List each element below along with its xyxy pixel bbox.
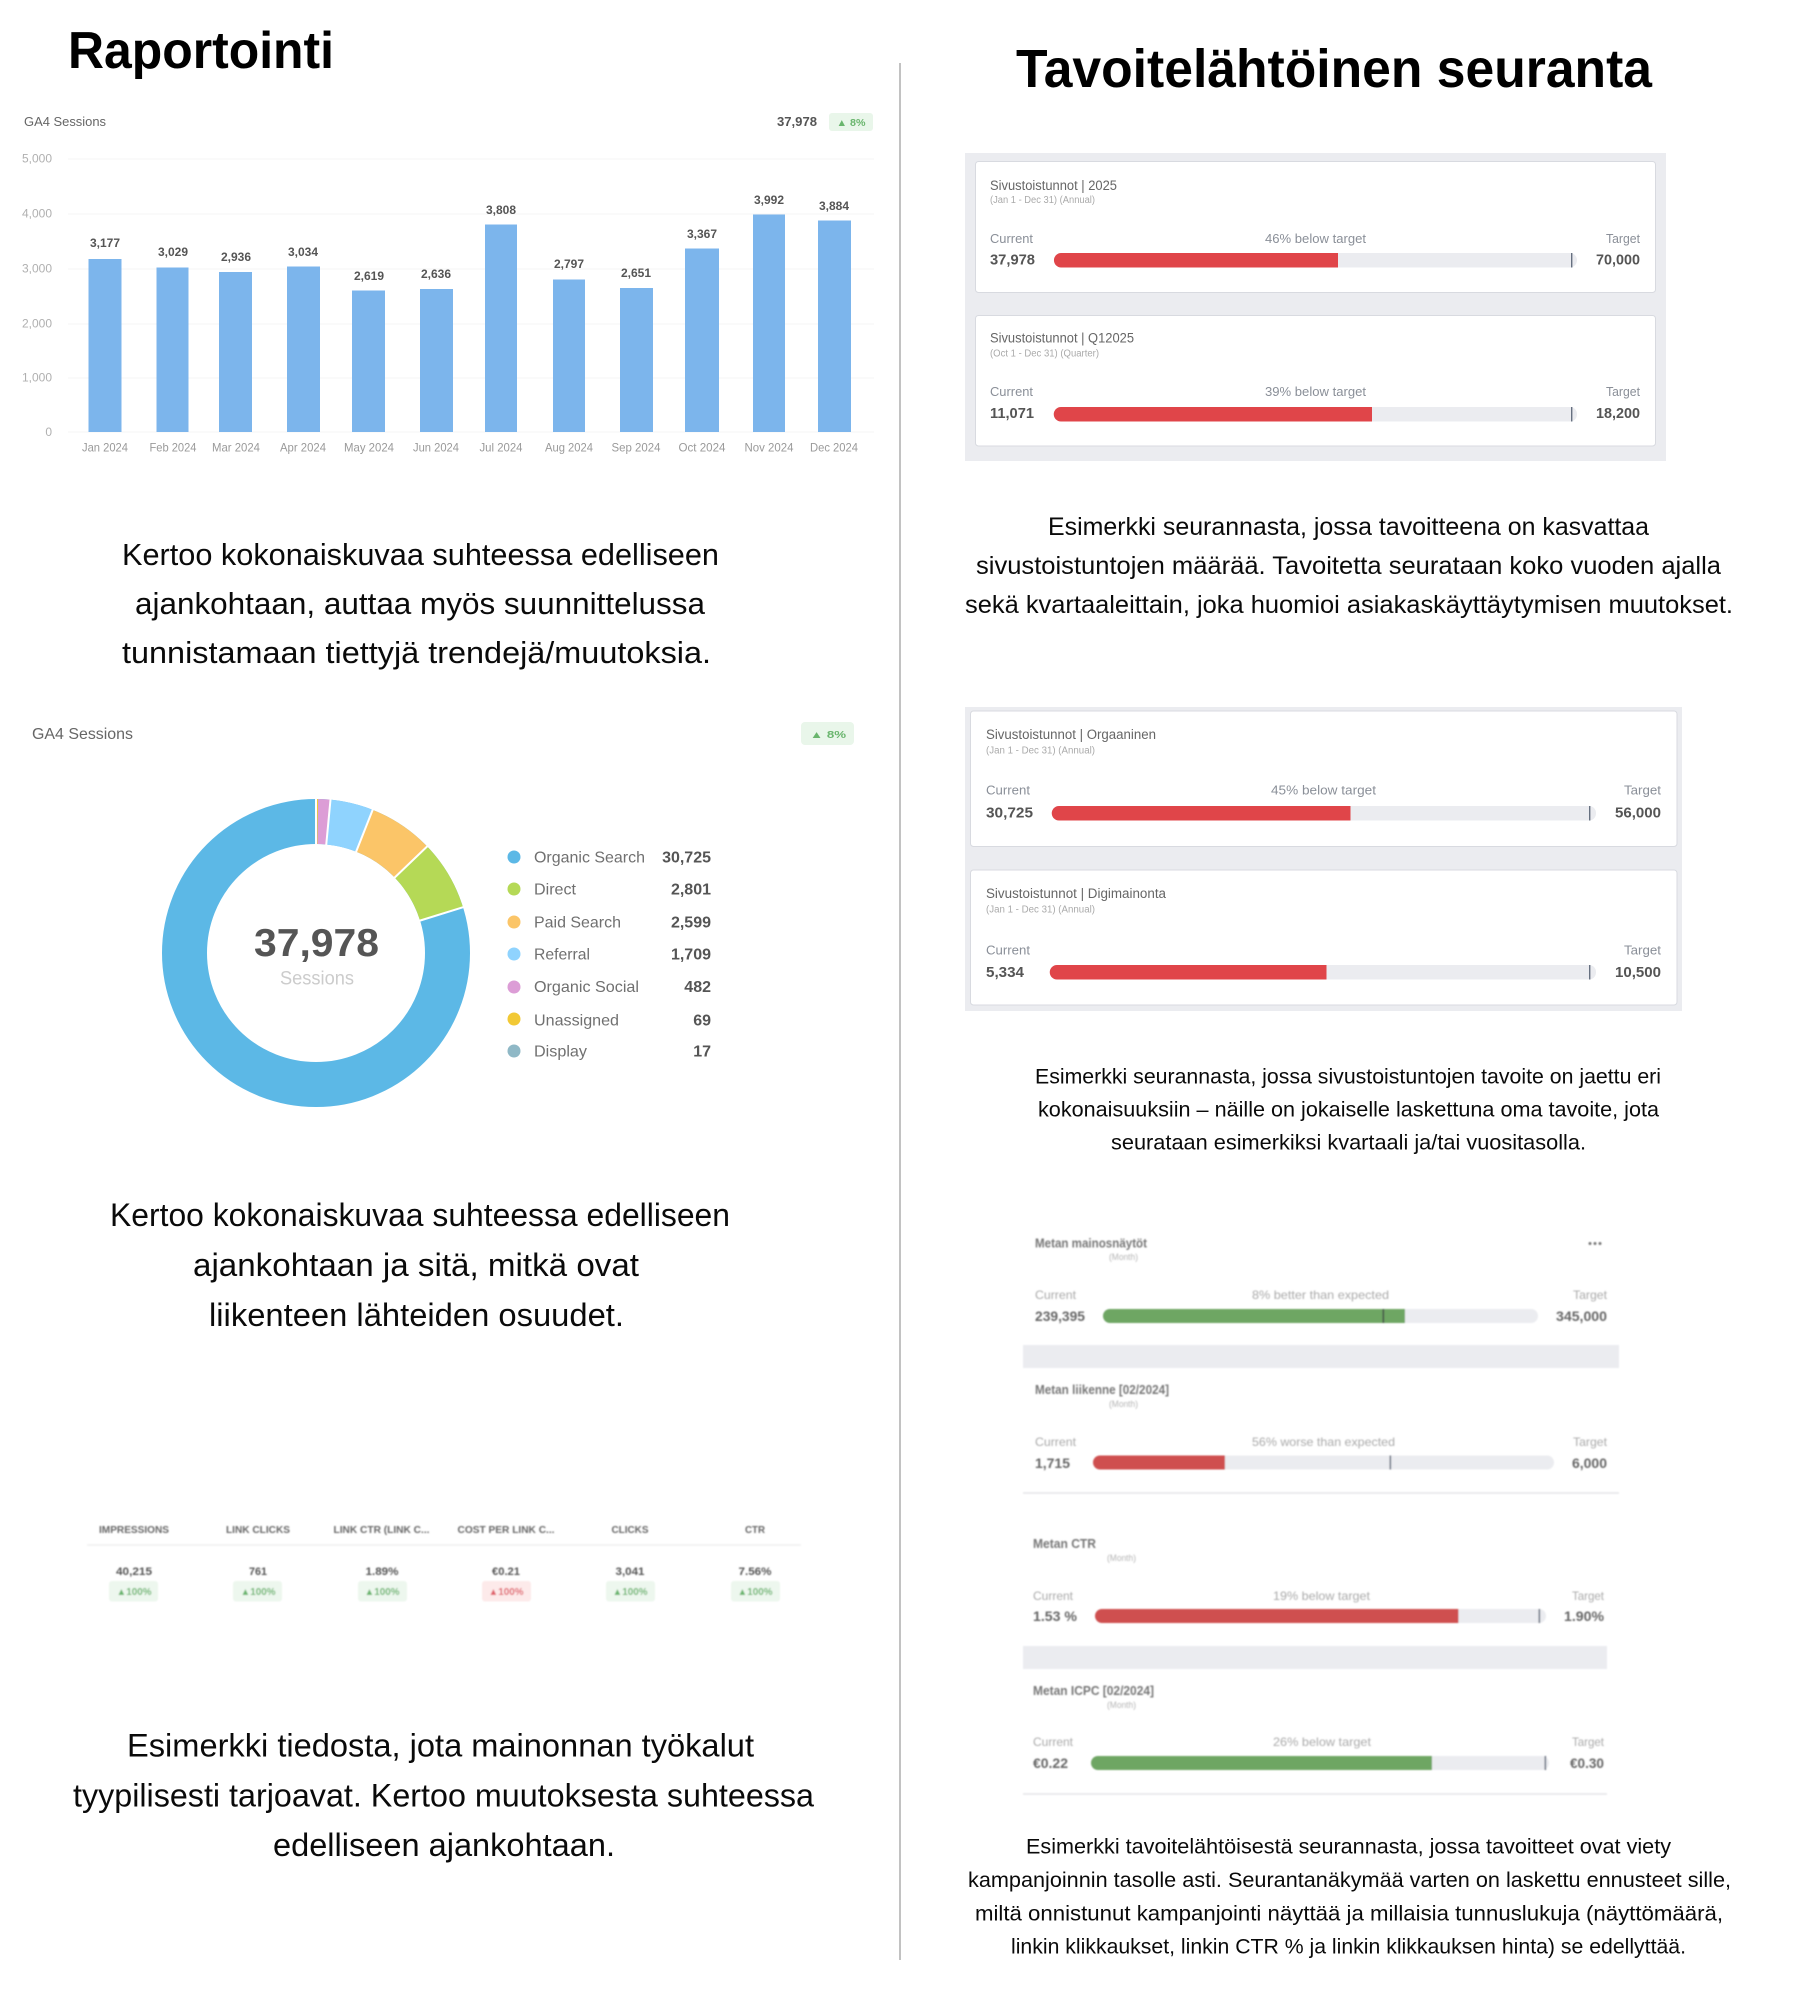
month labels: Jun 2024 — [413, 440, 459, 454]
text block: table description: tyypilisesti tarjoavat. Kertoo muutoksesta suhteessa — [73, 1778, 814, 1814]
text block: bar chart description: tunnistamaan tiettyjä trendejä/muutoksia. — [122, 635, 711, 670]
goal: Metan CTR: 1.53 % — [1033, 1608, 1078, 1624]
text block: donut chart description: ajankohtaan ja sitä, mitkä ovat — [193, 1247, 639, 1283]
y axis labels: 4,000 — [22, 206, 52, 220]
legend: 2,801 — [671, 882, 711, 898]
table values — [116, 1566, 772, 1578]
month labels: Oct 2024 — [678, 440, 726, 454]
goal: Metan ICPC: Metan ICPC [02/2024] — [1033, 1684, 1154, 1698]
goal: Metan ICPC: Current — [1033, 1735, 1074, 1749]
month labels: Sep 2024 — [612, 440, 661, 454]
change badges: ▲100% — [116, 1587, 152, 1598]
text block: annual and quarterly goals description: sekä kvartaaleittain, joka huomioi asiakaskäyttäytymisen muutokset. — [965, 591, 1733, 619]
text block: donut chart description: liikenteen lähteiden osuudet. — [209, 1297, 624, 1333]
goal: Metan mainosnäytöt: 8% better than expected — [1252, 1288, 1389, 1302]
bar value labels: 3,034 — [288, 245, 318, 259]
text block: channel goals description — [1035, 1066, 1661, 1154]
goal card: Q12025: 18,200 — [1596, 406, 1640, 422]
goal card: 2025 — [976, 162, 1656, 292]
goal card: Orgaaninen — [970, 711, 1677, 846]
table header row: LINK CLICKS — [226, 1524, 290, 1536]
text block: bar chart description: Kertoo kokonaiskuvaa suhteessa edelliseen — [122, 537, 719, 572]
goal: Metan ICPC: Target — [1572, 1735, 1605, 1749]
goal: Metan mainosnäytöt: Current — [1035, 1288, 1077, 1302]
month labels: May 2024 — [344, 440, 394, 454]
chart total: 37,978 — [777, 114, 817, 129]
bar value labels — [90, 193, 849, 283]
text block: donut chart description: Kertoo kokonaiskuvaa suhteessa edelliseen — [110, 1197, 730, 1233]
y axis labels: 1,000 — [22, 370, 52, 384]
text block: campaign goals description: miltä onnistunut kampanjointi näyttää ja millaisia tunnuslukuja (näyttömäärä, — [975, 1902, 1723, 1926]
text block: bar chart description — [122, 537, 719, 670]
text block: bar chart description: ajankohtaan, auttaa myös suunnittelussa — [135, 586, 706, 621]
goal: Metan mainosnäytöt: 345,000 — [1556, 1308, 1607, 1324]
goal: Metan mainosnäytöt — [1035, 1236, 1608, 1324]
change badge: ▲ 8% — [810, 730, 846, 741]
text block: table description — [73, 1728, 814, 1863]
panel: site sessions goals by channel — [965, 707, 1682, 1011]
goal card: Orgaaninen: 45% below target — [1271, 782, 1376, 798]
change badge: ▲ 8% — [836, 118, 866, 129]
legend: 17 — [693, 1044, 711, 1060]
change badge — [829, 113, 873, 131]
change badges: ▲100% — [364, 1587, 400, 1598]
separator band — [1023, 1345, 1619, 1368]
legend: Unassigned — [534, 1012, 619, 1030]
legend: 1,709 — [671, 946, 711, 964]
goal card: Digimainonta: 10,500 — [1615, 965, 1661, 981]
text block: campaign goals description — [968, 1836, 1731, 1958]
goal card: Digimainonta: 5,334 — [986, 965, 1024, 981]
goal: Metan ICPC: €0.30 — [1570, 1755, 1604, 1771]
goal card: 2025: (Jan 1 - Dec 31) (Annual) — [990, 195, 1095, 206]
table header row: CTR — [745, 1524, 765, 1536]
goal card: 2025: 70,000 — [1596, 252, 1640, 268]
text block: annual and quarterly goals description — [965, 513, 1733, 619]
table header row: IMPRESSIONS — [99, 1524, 169, 1536]
goal: Metan mainosnäytöt: Target — [1573, 1288, 1608, 1302]
legend: 30,725 — [662, 850, 711, 866]
panel: Meta campaign goals — [1023, 1236, 1619, 1794]
goal: Metan liikenne: Current — [1035, 1435, 1077, 1449]
month labels: Feb 2024 — [150, 440, 197, 454]
donut ring — [130, 767, 502, 1139]
title: Tavoitelähtöinen seuranta: Tavoitelähtöinen seuranta — [1016, 39, 1653, 99]
month labels: Jul 2024 — [480, 440, 523, 454]
goal: Metan liikenne: 1,715 — [1035, 1455, 1070, 1471]
text block: campaign goals description: kampanjoinnin tasolle asti. Seurantanäkymää varten on laskettu ennusteet sille, — [968, 1869, 1731, 1892]
metrics table: ad platform KPIs — [87, 1524, 801, 1602]
goal: Metan ICPC: 26% below target — [1273, 1735, 1372, 1749]
panel: site sessions goals, annual and quarterly — [965, 153, 1666, 461]
change badges: ▲100% — [488, 1587, 524, 1598]
text block: table description: Esimerkki tiedosta, jota mainonnan työkalut — [127, 1728, 754, 1764]
separator band — [1023, 1646, 1607, 1669]
bar value labels: 3,992 — [754, 193, 784, 207]
goal card: 2025: Current — [990, 231, 1033, 246]
grid lines — [68, 159, 874, 432]
table values: 7.56% — [738, 1566, 772, 1578]
text block: channel goals description: kokonaisuuksiin – näille on jokaiselle laskettuna oma tavoite, jota — [1038, 1098, 1659, 1122]
goal: Metan CTR: 1.90% — [1564, 1608, 1605, 1624]
bar value labels: 2,619 — [354, 269, 384, 283]
legend: 482 — [684, 979, 711, 996]
goal: Metan liikenne — [1035, 1383, 1608, 1471]
chart heading: GA4 Sessions — [24, 114, 106, 129]
goal card: Q12025: Sivustoistunnot | Q12025 — [990, 330, 1134, 346]
goal card: 2025: Sivustoistunnot | 2025 — [990, 178, 1117, 193]
goal card: Digimainonta: Target — [1624, 942, 1661, 958]
donut centre label: Sessions — [280, 968, 354, 990]
legend: Display — [534, 1044, 587, 1060]
goal card: Digimainonta: Sivustoistunnot | Digimainonta — [986, 886, 1166, 901]
goal card: Orgaaninen: 56,000 — [1615, 806, 1661, 822]
change badge — [801, 722, 854, 745]
goal: Metan liikenne: Metan liikenne [02/2024] — [1035, 1383, 1169, 1397]
text block: channel goals description: Esimerkki seurannasta, jossa sivustoistuntojen tavoite on jaettu eri — [1035, 1066, 1661, 1088]
goal card: Q12025: 39% below target — [1265, 384, 1366, 399]
bar value labels: 3,367 — [687, 227, 717, 241]
goal: Metan liikenne: (Month) — [1109, 1399, 1138, 1410]
divider between columns — [899, 63, 901, 1960]
bars — [88, 214, 851, 432]
month labels: Mar 2024 — [212, 440, 260, 454]
table values: €0.21 — [492, 1566, 520, 1578]
table header row: COST PER LINK C... — [458, 1524, 555, 1536]
table values: 1.89% — [366, 1566, 399, 1578]
goal card: Q12025: Current — [990, 384, 1033, 399]
donut centre value: 37,978 — [254, 922, 379, 965]
bar value labels: 2,936 — [221, 250, 251, 264]
goal card: 2025: 46% below target — [1265, 231, 1366, 246]
table header row: CLICKS — [612, 1524, 648, 1536]
goal card: Digimainonta — [970, 870, 1677, 1005]
bar value labels: 3,177 — [90, 236, 120, 250]
change badges: ▲100% — [240, 1587, 276, 1598]
goal: Metan CTR: Current — [1033, 1589, 1074, 1603]
text block: campaign goals description: linkin klikkaukset, linkin CTR % ja linkin klikkauksen hinta) se edellyttää. — [1011, 1936, 1686, 1958]
goal card: 2025: 37,978 — [990, 252, 1035, 268]
goal card: Digimainonta: (Jan 1 - Dec 31) (Annual) — [986, 904, 1095, 916]
table header row — [99, 1524, 765, 1536]
y axis labels: 3,000 — [22, 262, 52, 276]
text block: annual and quarterly goals description: sivustoistuntojen määrää. Tavoitetta seurataan koko vuoden ajalla — [976, 552, 1721, 580]
goal: Metan liikenne: 6,000 — [1572, 1455, 1607, 1471]
goal: Metan ICPC: €0.22 — [1033, 1755, 1068, 1771]
change badges: ▲100% — [612, 1587, 648, 1598]
month labels: Apr 2024 — [280, 440, 326, 454]
text block: annual and quarterly goals description: Esimerkki seurannasta, jossa tavoitteena on kasvattaa — [1048, 513, 1649, 541]
goal: Metan CTR: Metan CTR — [1033, 1537, 1096, 1551]
legend: Paid Search — [534, 914, 621, 932]
goal card: Orgaaninen: Target — [1624, 782, 1661, 798]
table values: 40,215 — [116, 1566, 152, 1578]
text block: donut chart description — [110, 1197, 730, 1333]
goal: Metan ICPC: (Month) — [1107, 1700, 1136, 1711]
month labels: Nov 2024 — [744, 440, 794, 454]
bar value labels: 2,636 — [421, 267, 451, 281]
table values: 3,041 — [616, 1566, 644, 1578]
goal card: Digimainonta: Current — [986, 942, 1030, 958]
y axis labels: 0 — [45, 425, 52, 439]
goal: Metan liikenne: 56% worse than expected — [1252, 1435, 1395, 1449]
panel heading: GA4 Sessions — [32, 726, 133, 743]
legend: Referral — [534, 946, 590, 964]
goal: Metan CTR: Target — [1572, 1589, 1605, 1603]
goal card: 2025: Target — [1606, 231, 1640, 246]
goal card: Q12025 — [976, 316, 1656, 446]
title: Raportointi: Raportointi — [68, 22, 334, 80]
bar value labels: 3,808 — [486, 203, 516, 217]
month labels: Jan 2024 — [82, 440, 128, 454]
month labels: Aug 2024 — [545, 440, 593, 454]
text block: table description: edelliseen ajankohtaan. — [273, 1827, 615, 1863]
bar value labels: 2,651 — [621, 266, 651, 280]
goal card: Q12025: (Oct 1 - Dec 31) (Quarter) — [990, 348, 1099, 360]
month labels: Dec 2024 — [810, 440, 858, 454]
donut chart panel: GA4 Sessions by channel — [32, 722, 854, 1139]
change badges: ▲100% — [738, 1587, 773, 1598]
y axis labels: 2,000 — [22, 316, 52, 330]
bar value labels: 2,797 — [554, 257, 584, 271]
goal card: Orgaaninen: 30,725 — [986, 806, 1033, 822]
legend — [508, 850, 711, 1060]
legend: Organic Search — [534, 850, 645, 866]
goal: Metan liikenne: Target — [1573, 1435, 1608, 1449]
y axis labels: 5,000 — [22, 152, 52, 166]
goal: Metan CTR: (Month) — [1107, 1553, 1136, 1564]
change badges — [109, 1581, 780, 1602]
goal card: Q12025: 11,071 — [990, 406, 1034, 422]
goal: Metan mainosnäytöt: (Month) — [1109, 1252, 1138, 1263]
goal: Metan ICPC — [1033, 1684, 1605, 1771]
goal: Metan mainosnäytöt: 239,395 — [1035, 1308, 1085, 1324]
text block: campaign goals description: Esimerkki tavoitelähtöisestä seurannasta, jossa tavoitteet ovat viety — [1026, 1836, 1672, 1858]
y axis labels — [22, 152, 52, 439]
bar value labels: 3,029 — [158, 245, 188, 259]
goal card: Orgaaninen: Current — [986, 782, 1030, 798]
goal: Metan CTR — [1033, 1537, 1605, 1624]
legend: 2,599 — [671, 914, 711, 932]
month labels — [82, 440, 858, 454]
goal card: Q12025: Target — [1606, 384, 1640, 399]
legend: Direct — [534, 882, 577, 898]
goal: Metan mainosnäytöt: Metan mainosnäytöt — [1035, 1236, 1148, 1250]
text block: channel goals description: seurataan esimerkiksi kvartaali ja/tai vuositasolla. — [1111, 1132, 1586, 1154]
bar value labels: 3,884 — [819, 199, 849, 213]
goal card: Orgaaninen: (Jan 1 - Dec 31) (Annual) — [986, 746, 1095, 756]
bar chart: GA4 Sessions by month — [22, 113, 874, 454]
legend: Organic Social — [534, 979, 639, 996]
table header row: LINK CTR (LINK C... — [334, 1524, 430, 1536]
goal card: Orgaaninen: Sivustoistunnot | Orgaaninen — [986, 727, 1156, 742]
legend: 69 — [693, 1012, 711, 1030]
goal: Metan CTR: 19% below target — [1273, 1589, 1371, 1603]
table values: 761 — [249, 1566, 267, 1578]
